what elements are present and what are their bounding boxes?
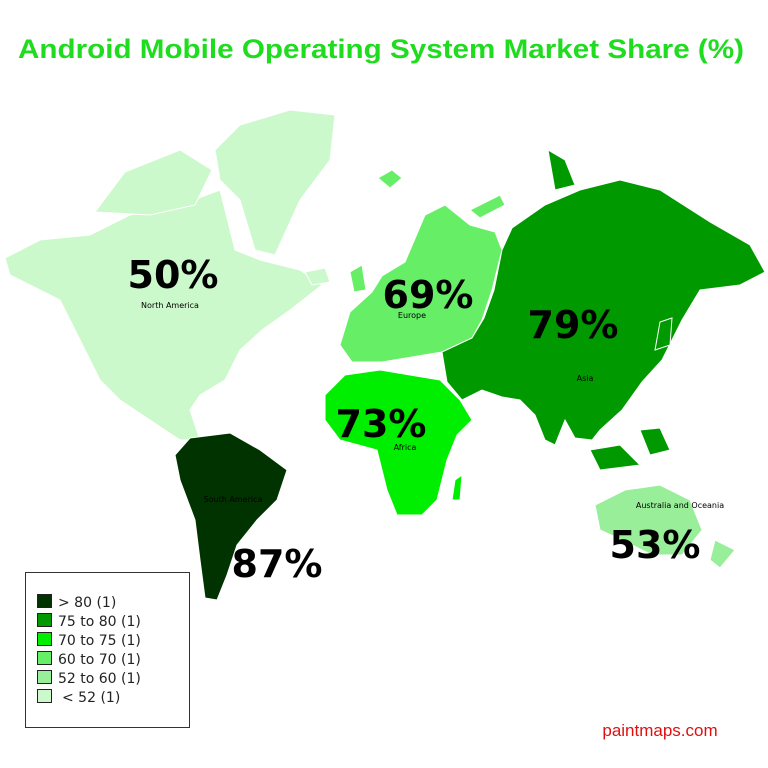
legend: < 52 (1)	[62, 690, 120, 706]
label: Asia: Asia	[577, 374, 593, 383]
label: Australia and Oceania	[610, 501, 724, 567]
legend: 60 to 70 (1)	[58, 652, 141, 668]
label: Asia: 79%	[528, 303, 618, 347]
legend: > 80 (1)	[58, 595, 116, 611]
label: Europe: 69%	[383, 273, 473, 317]
labels	[128, 253, 724, 586]
region: Asia	[442, 150, 765, 470]
label: South America: 87%	[232, 542, 322, 586]
label: Africa: Africa	[394, 443, 416, 452]
title: Android Mobile Operating System Market Share (%)	[18, 34, 744, 64]
label: North America: 50%	[128, 253, 218, 297]
legend: 75 to 80 (1)	[58, 614, 141, 630]
credit: paintmaps.com	[602, 721, 718, 740]
label: Australia and Oceania: Australia and Oceania	[636, 501, 724, 510]
label: Africa: 73%	[336, 402, 426, 446]
region: South America	[175, 433, 287, 600]
region: Africa	[325, 370, 472, 515]
legend: 52 to 60 (1)	[58, 671, 141, 687]
region: Europe	[340, 170, 505, 362]
label: Asia	[528, 303, 618, 383]
label: Australia and Oceania: 53%	[610, 523, 700, 567]
label: Europe: Europe	[398, 311, 426, 320]
region: Australia and Oceania	[595, 485, 735, 568]
legend	[26, 572, 190, 728]
label: South America	[204, 495, 322, 586]
region: North America	[5, 110, 335, 440]
map	[5, 110, 765, 600]
label: South America: South America	[204, 495, 262, 504]
legend: 70 to 75 (1)	[58, 633, 141, 649]
label: North America: North America	[141, 301, 199, 310]
